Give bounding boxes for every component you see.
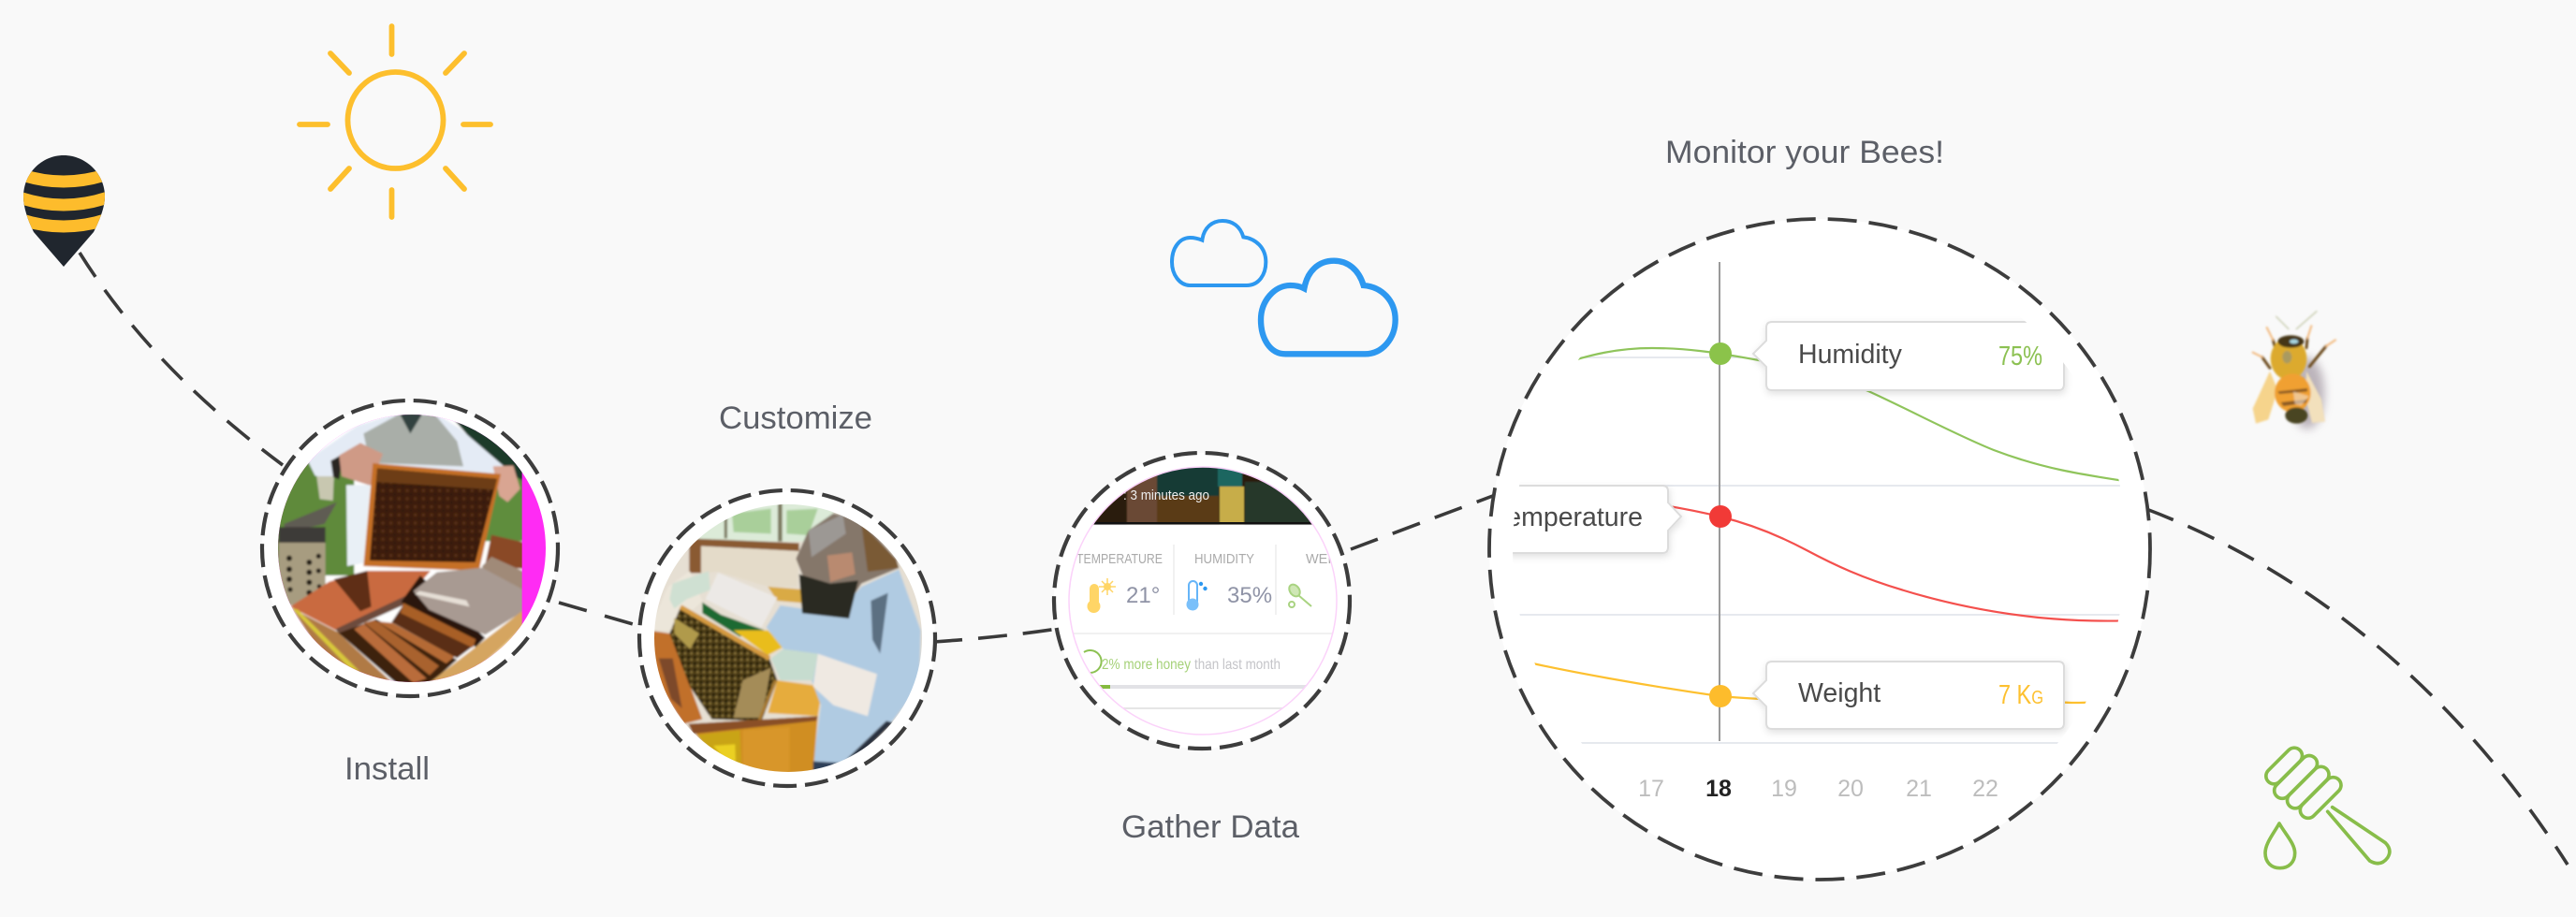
icon: blue thermometer: [1187, 581, 1208, 610]
metric labels: WEIGHT: [1306, 552, 1360, 567]
panel: install photo circle: [262, 400, 558, 697]
icon: yellow thermometer: [1088, 578, 1116, 613]
axis labels: [1640, 779, 1998, 796]
value: humidity: 35%: [1227, 583, 1272, 608]
humidity line: [1554, 348, 2144, 484]
tooltip: humidity: [1753, 322, 2064, 390]
heading: gather data: Gather Data: [1121, 809, 1299, 845]
weight line: [1534, 662, 2086, 704]
icon: clouds: [1172, 221, 1396, 354]
tooltip: weight: [1753, 662, 2064, 729]
tooltip: temperature: [1513, 485, 1683, 560]
dashboard photo band: [1093, 468, 1312, 526]
honey trend: [1084, 650, 1281, 673]
icon: sun: [300, 26, 490, 217]
dashed path: Gather Data to Monitor: [1351, 494, 1498, 549]
tooltip: humidity: 75%: [1998, 342, 2042, 371]
metric labels: TEMPERATURE: [1076, 552, 1163, 567]
heading: customize: Customize: [719, 400, 872, 436]
tooltip: temperature: Temperature: [1493, 502, 1643, 532]
heading: monitor your bees: Monitor your Bees!: [1665, 135, 1944, 170]
cursor line: [1719, 262, 1720, 741]
icon: bee: [2253, 312, 2335, 429]
axis labels: 18: [1705, 776, 1732, 802]
axis labels: 20: [1837, 776, 1864, 802]
axis labels: 21: [1906, 776, 1932, 802]
dashed path: pin to Install: [80, 253, 283, 465]
data points: [1709, 342, 1732, 707]
temperature line: [1672, 505, 2119, 622]
heading: install: Install: [344, 751, 430, 787]
honey trend: 2% more honey: [1102, 657, 1191, 673]
dashed path: Install to Customize: [559, 603, 646, 628]
axis labels: 22: [1972, 776, 1998, 802]
icon: location pin bee: [23, 155, 105, 267]
dashboard photo band: : 3 minutes ago: [1123, 488, 1209, 503]
dashed path: Customize to Gather Data: [933, 629, 1058, 642]
honey trend: than last month: [1194, 657, 1281, 673]
icon: honey dipper: [2265, 756, 2390, 868]
value: temperature: 21°: [1126, 583, 1160, 608]
tooltip: weight: 7 Kg: [1998, 680, 2043, 710]
tooltip: humidity: Humidity: [1798, 340, 1903, 370]
icon: honey dipper small: [1287, 582, 1311, 607]
progress bar: [1098, 685, 1308, 689]
tooltip: weight: Weight: [1798, 678, 1881, 708]
panel: customize photo circle: [639, 490, 935, 786]
axis labels: 19: [1771, 776, 1797, 802]
metric labels: [1078, 554, 1331, 563]
metric labels: HUMIDITY: [1194, 552, 1254, 567]
panel: monitor chart circle: [1487, 217, 2152, 881]
panel: gather data dashboard circle: [1054, 453, 1360, 749]
dashed path: Monitor onward: [2146, 509, 2568, 865]
axis labels: 17: [1638, 776, 1664, 802]
